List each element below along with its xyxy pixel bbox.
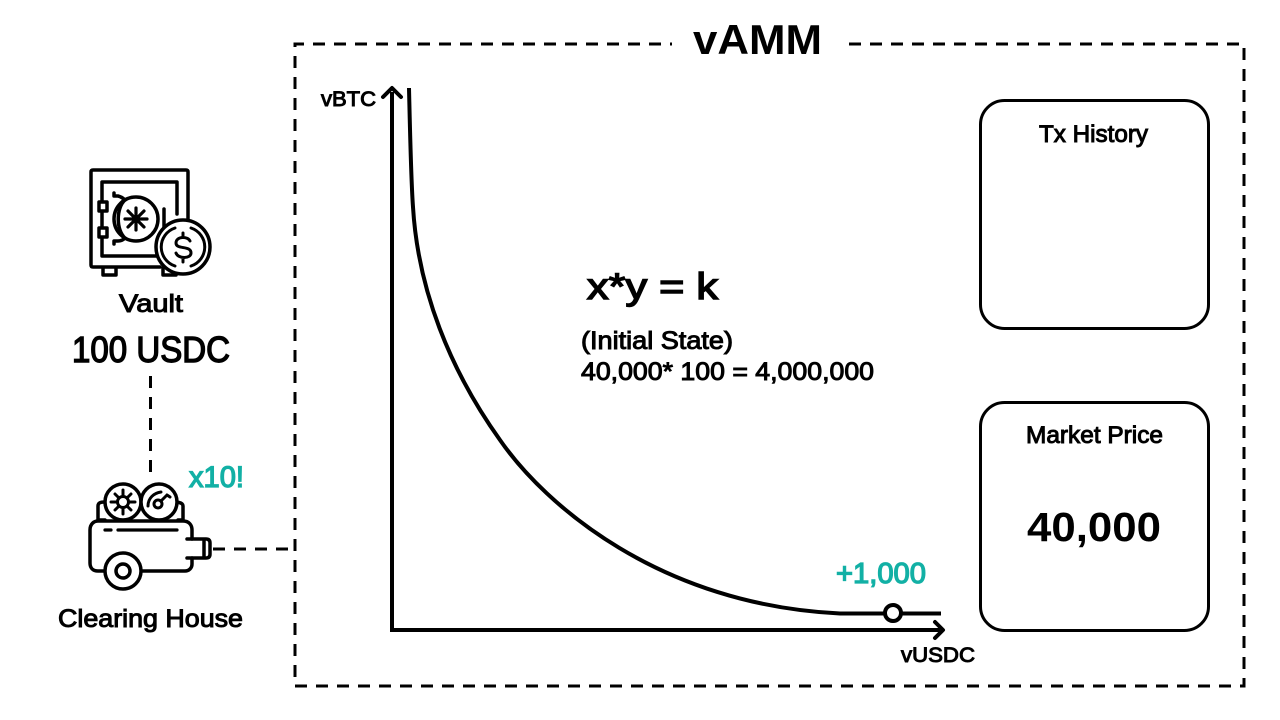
arrowhead: x axis	[935, 622, 943, 638]
label: vUSDC axis: vUSDC	[901, 644, 975, 667]
label: Vault: Vault	[119, 290, 183, 318]
label: vBTC axis: vBTC	[321, 88, 376, 111]
panel: Tx History: Tx History	[1039, 121, 1148, 148]
chart: bonding curve	[321, 88, 975, 667]
formula: x*y=k: x*y = k	[587, 266, 719, 307]
text: initial state: 40,000* 100 = 4,000,000	[581, 358, 874, 386]
text: initial state: (Initial State)	[581, 327, 733, 355]
axes	[392, 92, 940, 630]
callout: plus 1,000: +1,000	[836, 558, 926, 590]
panel: Tx History	[980, 100, 1208, 328]
icon: vault safe	[91, 170, 210, 275]
callout: x10 leverage: x10!	[189, 461, 244, 494]
text: initial state	[581, 327, 874, 386]
label: Clearing House: Clearing House	[58, 605, 243, 633]
panel: Market Price	[980, 402, 1208, 630]
connector: vault to clearing house	[149, 376, 152, 474]
panel: Market Price: Market Price	[1026, 422, 1163, 449]
marker: current point	[885, 605, 901, 621]
arrowhead: y axis	[383, 88, 401, 97]
panel: Market Price: 40,000	[1027, 504, 1161, 550]
icon: clearing house compressor	[90, 484, 210, 589]
curve: x*y=k	[409, 88, 941, 614]
label: vault balance: 100 USDC	[72, 329, 230, 370]
heading: vAMM: vAMM	[693, 16, 822, 63]
panel: vAMM dashed frame	[295, 44, 1244, 686]
connector: clearing house to vAMM	[213, 548, 288, 550]
